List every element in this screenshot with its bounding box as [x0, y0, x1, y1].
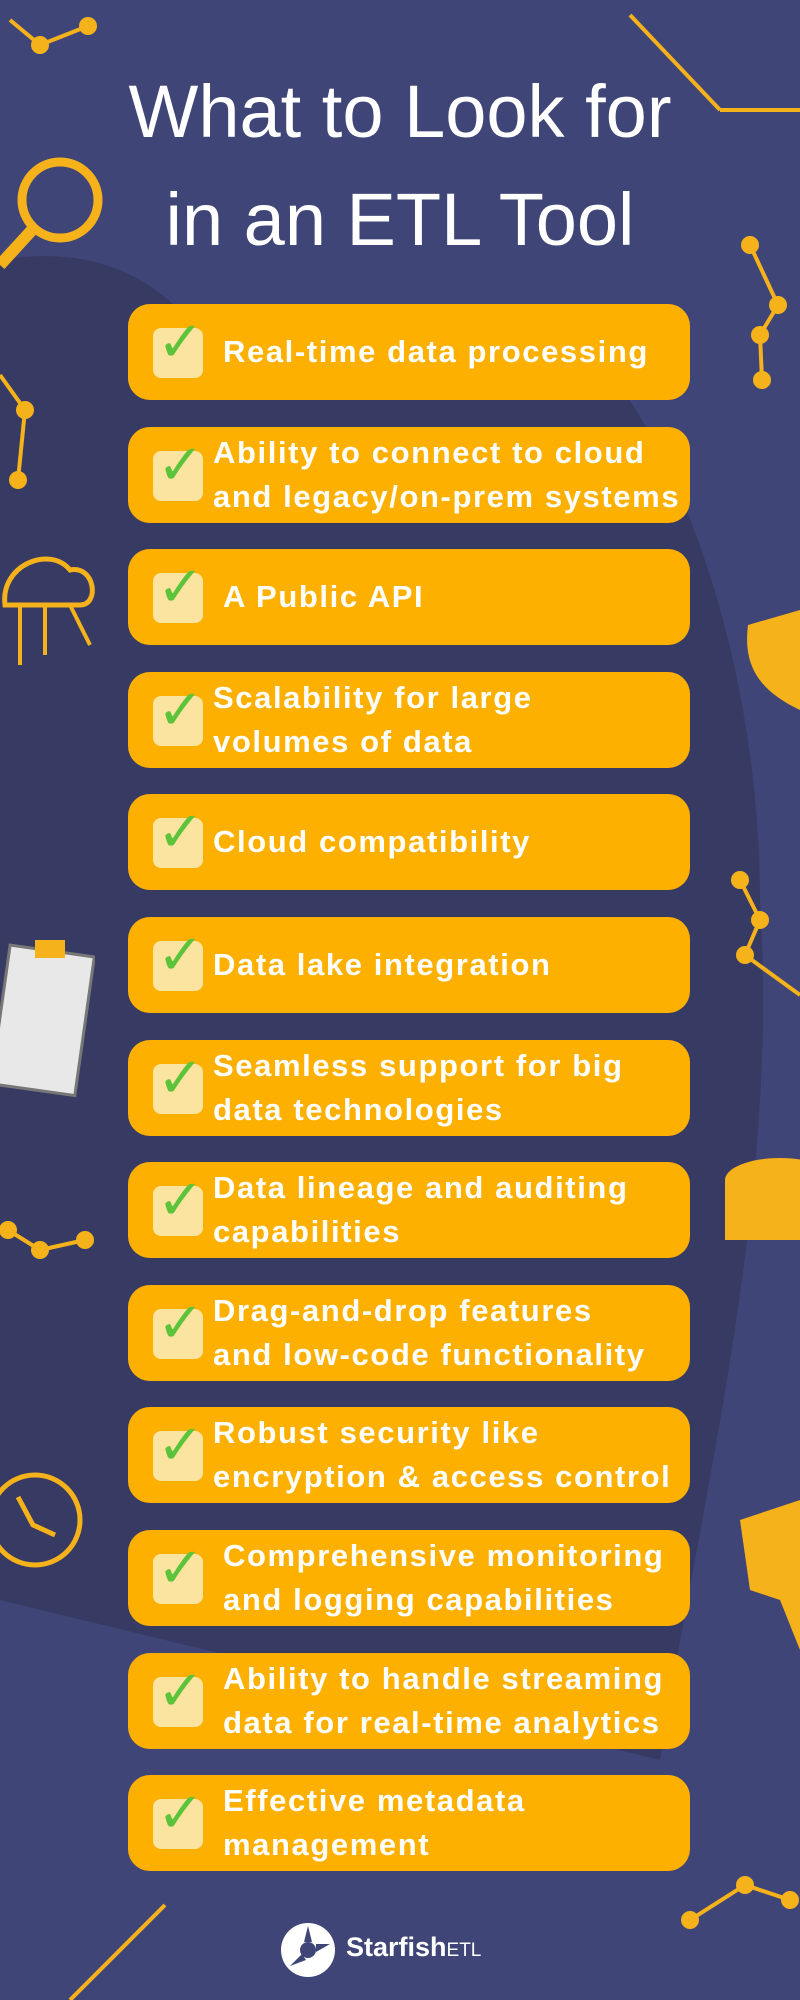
list item 13: ✓ — [157, 1781, 204, 1846]
list item 11: Comprehensive monitoring — [223, 1538, 664, 1573]
title: What to Look for — [129, 70, 671, 153]
list item 2: ✓ — [157, 433, 204, 498]
list item 7: Seamless support for big — [213, 1048, 623, 1083]
list item 12: ✓ — [157, 1659, 204, 1724]
list item 13: Effective metadata — [223, 1783, 526, 1818]
list item 10: encryption & access control — [213, 1459, 671, 1494]
list item 5 — [128, 794, 690, 890]
list item 4: volumes of data — [213, 724, 473, 759]
icon: database — [725, 1158, 800, 1240]
list item 3: A Public API — [223, 579, 424, 614]
list item 9: Drag-and-drop features — [213, 1293, 593, 1328]
list item 7: data technologies — [213, 1092, 504, 1127]
list item 2: Ability to connect to cloud — [213, 435, 645, 470]
list item 7 — [128, 1040, 690, 1136]
list item 7: ✓ — [157, 1046, 204, 1111]
list item 5: ✓ — [157, 800, 204, 865]
list item 8: capabilities — [213, 1214, 401, 1249]
list item 11: ✓ — [157, 1536, 204, 1601]
title — [128, 70, 671, 261]
list item 5: Cloud compatibility — [213, 824, 531, 859]
footer logo — [281, 1923, 481, 1977]
icon: shield — [747, 610, 800, 710]
list item 9: and low-code functionality — [213, 1337, 646, 1372]
icon: starfish logo — [281, 1923, 335, 1977]
list item 6: ✓ — [157, 923, 204, 988]
list item 11 — [128, 1530, 690, 1626]
list item 8 — [128, 1162, 690, 1258]
list item 12: data for real-time analytics — [223, 1705, 661, 1740]
list item 8: ✓ — [157, 1168, 204, 1233]
list item 10 — [128, 1407, 690, 1503]
list item 6: Data lake integration — [213, 947, 552, 982]
icon: cloud circuit — [2, 556, 95, 665]
list item 12 — [128, 1653, 690, 1749]
list item 12: Ability to handle streaming — [223, 1661, 664, 1696]
list item 1: ✓ — [157, 310, 204, 375]
list item 3 — [128, 549, 690, 645]
list item 4: Scalability for large — [213, 680, 533, 715]
list item 4: ✓ — [157, 678, 204, 743]
list item 10: Robust security like — [213, 1415, 540, 1450]
list item 1: Real-time data processing — [223, 334, 649, 369]
list item 10: ✓ — [157, 1413, 204, 1478]
list item 9: ✓ — [157, 1291, 204, 1356]
list item 9 — [128, 1285, 690, 1381]
icon: magnifier — [0, 158, 102, 269]
list item 2 — [128, 427, 690, 523]
icon: clock — [0, 1472, 82, 1568]
list item 11: and logging capabilities — [223, 1582, 614, 1617]
list item 8: Data lineage and auditing — [213, 1170, 628, 1205]
list item 13 — [128, 1775, 690, 1871]
title: in an ETL Tool — [166, 178, 634, 261]
list item 6 — [128, 917, 690, 1013]
list item 13: management — [223, 1827, 430, 1862]
icon: clipboard — [0, 940, 95, 1098]
list item 1 — [128, 304, 690, 400]
list item 4 — [128, 672, 690, 768]
brand name: StarfishETL — [346, 1932, 481, 1962]
icon: lightning — [740, 1500, 800, 1650]
list item 2: and legacy/on-prem systems — [213, 479, 680, 514]
list item 3: ✓ — [157, 555, 204, 620]
